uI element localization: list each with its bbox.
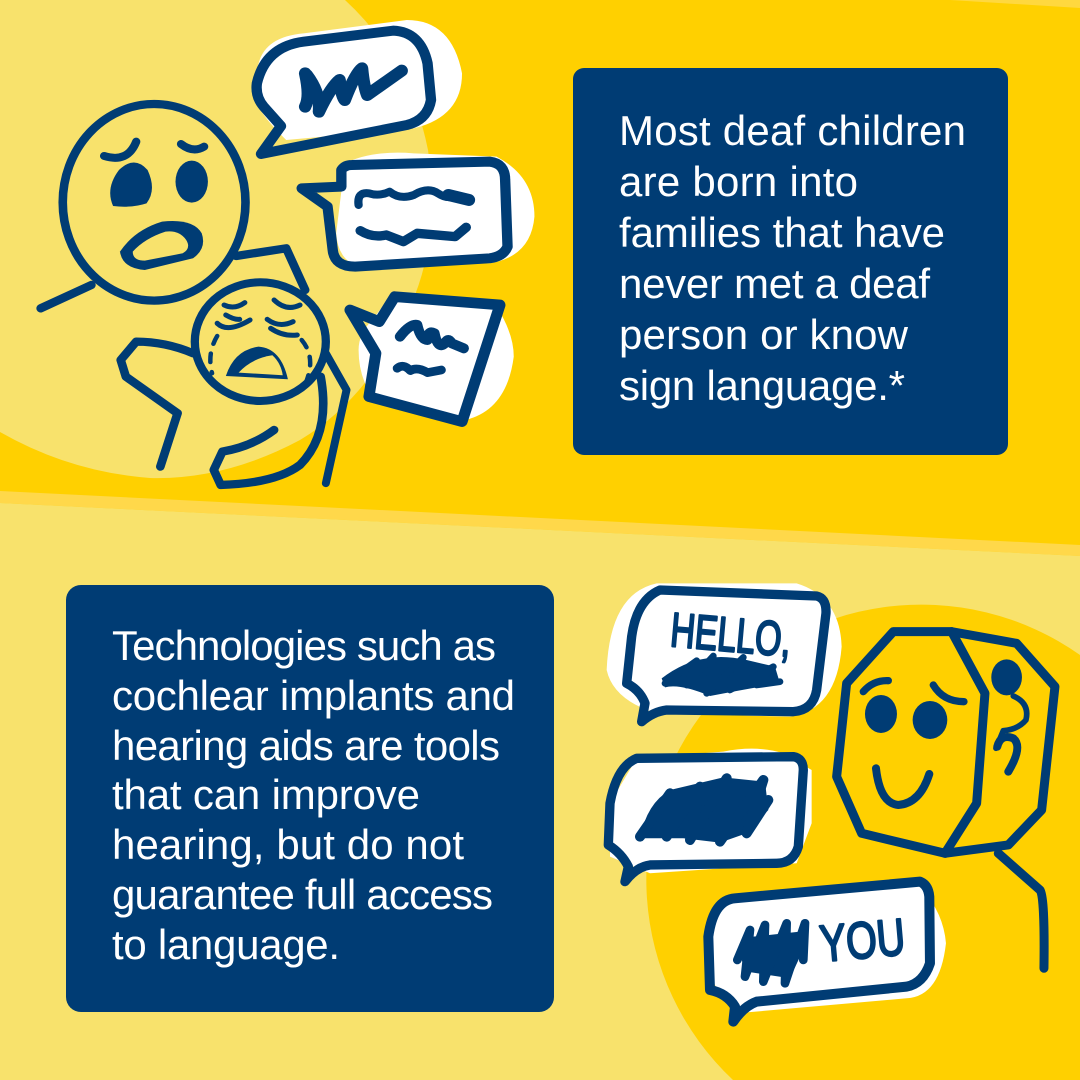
text block: top panel copy bbox=[619, 107, 966, 409]
person with implant bbox=[837, 632, 1055, 968]
text block: top panel copy: never met a deaf bbox=[619, 260, 930, 307]
text block: top panel copy: families that have bbox=[619, 209, 945, 256]
parent figure bbox=[41, 104, 305, 308]
panel: most deaf children bbox=[573, 68, 1008, 455]
speech bubble: hello: HELLO, bbox=[668, 603, 793, 667]
speech bubble 3 bbox=[350, 297, 514, 422]
text block: top panel copy: person or know bbox=[619, 311, 909, 358]
text block: bottom panel copy: that can improve bbox=[112, 771, 420, 818]
child mouth bbox=[226, 347, 288, 379]
illustration: person with cochlear implant and speech bubbles bbox=[607, 583, 1055, 1022]
text block: bottom panel copy bbox=[112, 622, 515, 968]
illustration: worried parent and crying child with speech bubbles bbox=[41, 20, 534, 485]
text block: bottom panel copy: Technologies such as bbox=[112, 622, 496, 669]
speech bubble: you: YOU bbox=[818, 907, 907, 973]
text block: top panel copy: sign language.* bbox=[619, 362, 905, 409]
text block: top panel copy: Most deaf children bbox=[619, 107, 966, 154]
speech bubble: hello bbox=[607, 583, 842, 722]
text block: bottom panel copy: guarantee full access bbox=[112, 871, 493, 918]
mouth bbox=[120, 221, 203, 270]
speech bubble: you bbox=[707, 882, 946, 1022]
text block: bottom panel copy: cochlear implants and bbox=[112, 672, 515, 719]
panel: technologies bbox=[66, 585, 554, 1012]
text block: bottom panel copy: hearing aids are tools bbox=[112, 722, 500, 769]
background: yellow circle lower right bbox=[646, 605, 1080, 1080]
background: light yellow blob top left bbox=[0, 0, 432, 478]
background: light yellow lower section bbox=[0, 503, 1080, 1080]
text block: top panel copy: are born into bbox=[619, 158, 858, 205]
text block: bottom panel copy: hearing, but do not bbox=[112, 821, 464, 868]
text block: bottom panel copy: to language. bbox=[112, 921, 340, 968]
crying child figure bbox=[121, 282, 347, 485]
speech bubble: scribbled bbox=[608, 749, 812, 882]
speech bubble 1 bbox=[252, 20, 462, 154]
speech bubble 2 bbox=[302, 153, 534, 267]
